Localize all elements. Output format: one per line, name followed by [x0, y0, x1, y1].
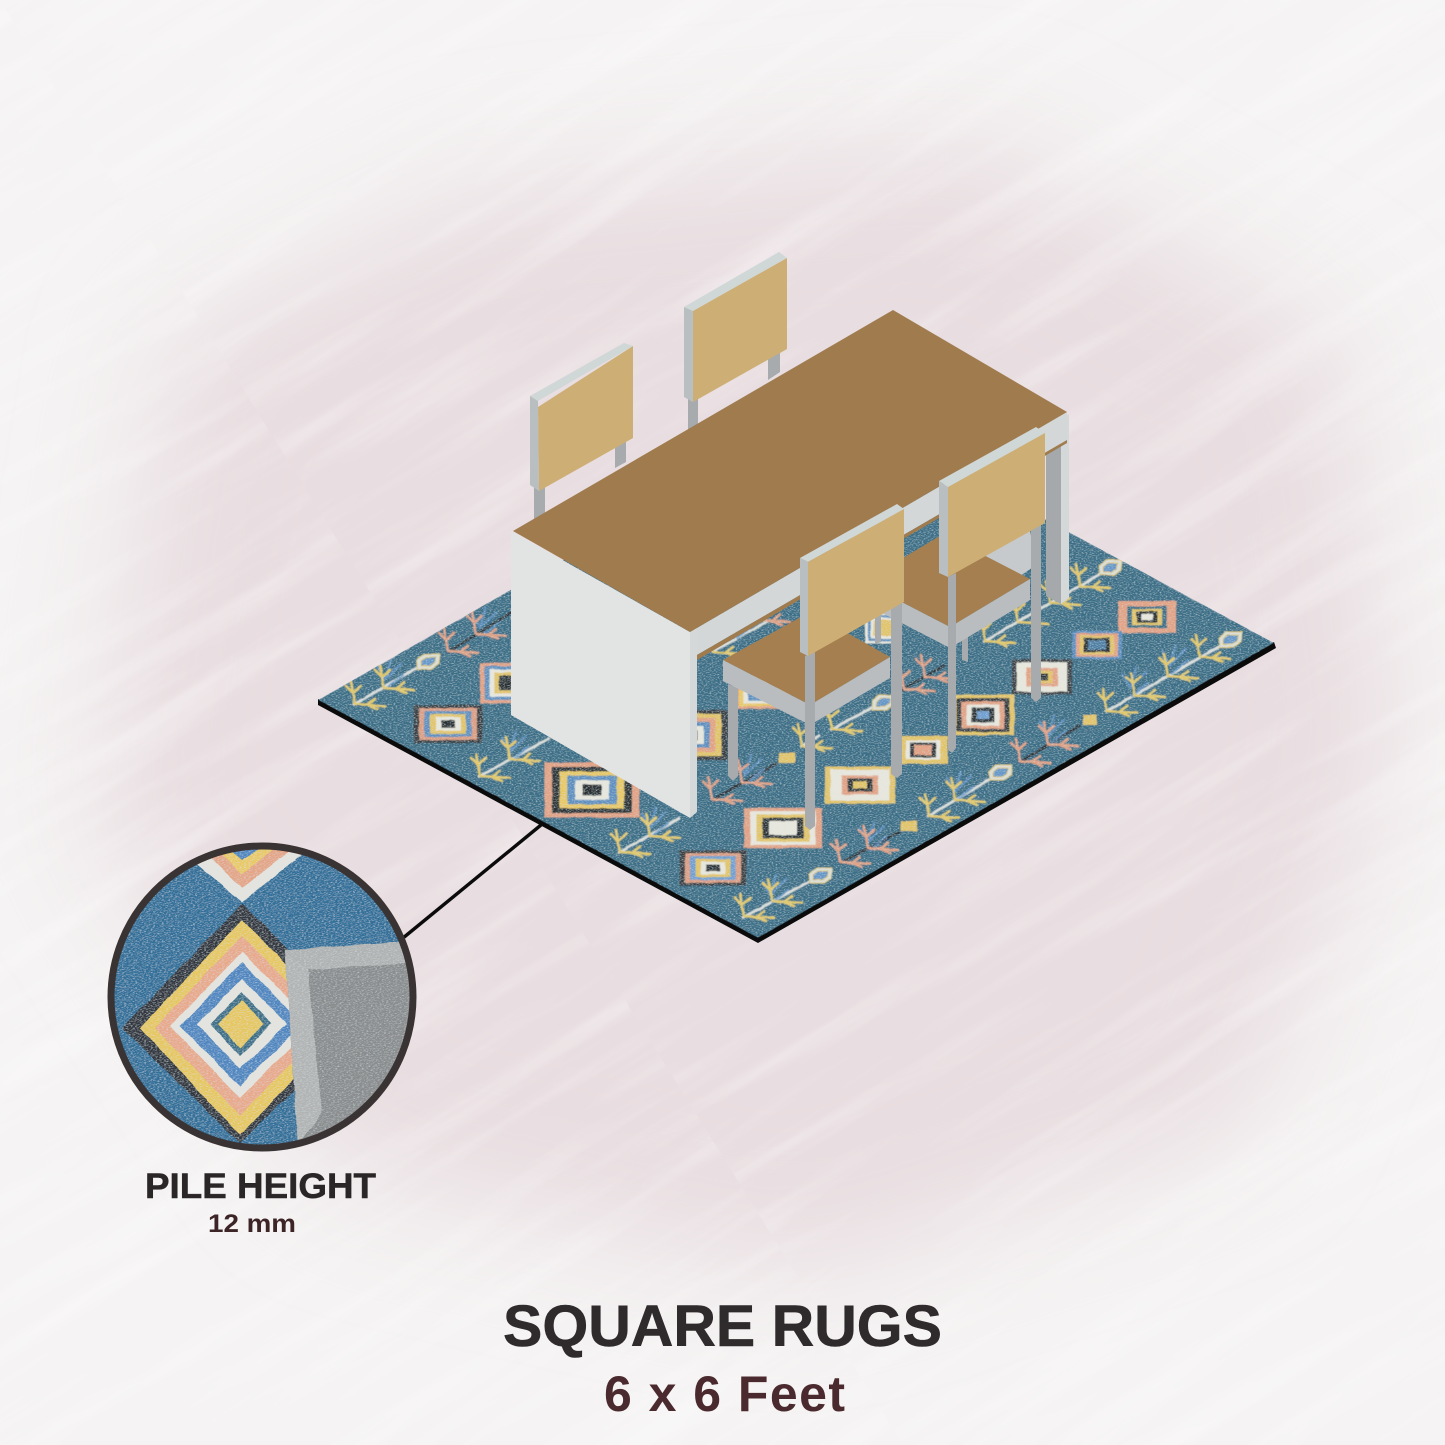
arrow motifs dark stem peach branches [439, 598, 1097, 867]
inset ring [111, 846, 413, 1148]
size subtitle: 6 x 6 Feet [604, 1366, 845, 1422]
table front leg [690, 628, 697, 818]
connector line to inset [403, 825, 541, 938]
table top [513, 310, 1067, 632]
table apron [690, 412, 1067, 655]
chair front-right [863, 427, 1045, 753]
rug surface with pattern [318, 486, 1274, 938]
chair back-left [530, 343, 633, 520]
infographic canvas [100, 146, 1394, 1412]
top chevron [197, 850, 302, 902]
gray rug backing [284, 942, 410, 1140]
large diamond [122, 904, 294, 1143]
chair front-center [723, 504, 904, 830]
table right leg [1046, 414, 1069, 604]
square motifs [414, 601, 1176, 886]
arrow motifs white stem yellow branches [346, 560, 1242, 921]
table apron underside [697, 440, 1067, 660]
chair back-right [684, 252, 787, 432]
pile height value: 12 mm [208, 1210, 296, 1238]
rug edge [318, 642, 1276, 943]
zoom inset circle [108, 842, 416, 1152]
table side panel [511, 531, 690, 818]
main title: SQUARE RUGS [503, 1294, 942, 1359]
rug with thick black edge [318, 486, 1276, 943]
pile height label: PILE HEIGHT [145, 1167, 376, 1206]
dining table [511, 310, 1069, 818]
